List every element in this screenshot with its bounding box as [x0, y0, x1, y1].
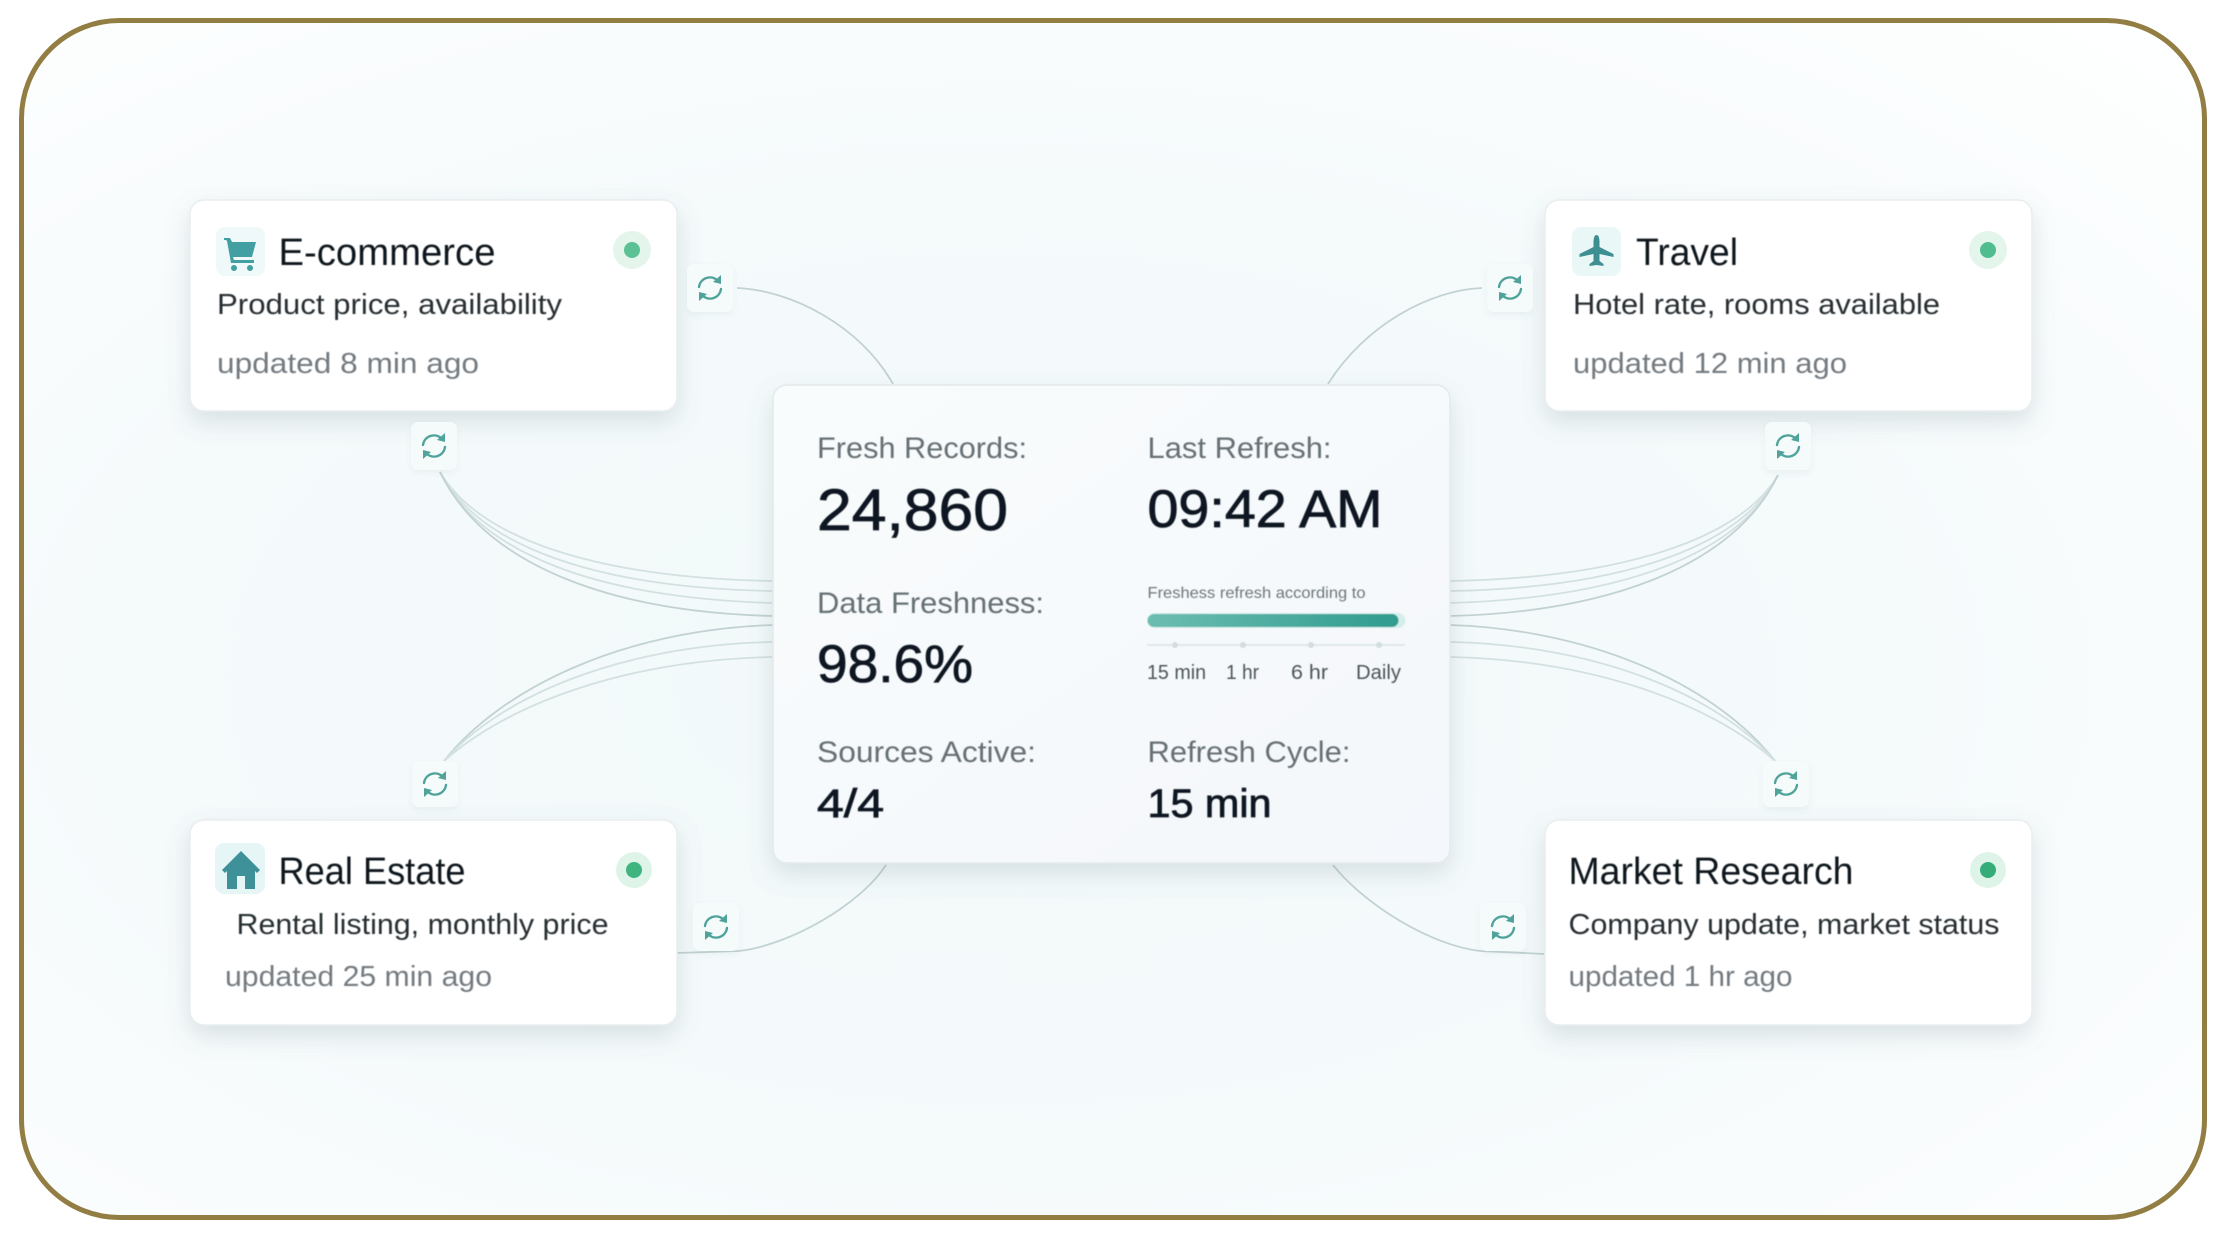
icon: sync, real estate right: [693, 903, 739, 951]
card: e-commerce: Product price, availability: [217, 289, 563, 321]
card: e-commerce: E-commerce: [278, 232, 496, 274]
icon: sync, e-commerce right: [687, 264, 733, 312]
stat: sources active: Sources Active:: [817, 736, 1036, 769]
stat: fresh records: [817, 432, 1027, 543]
refresh scale chart: Daily: [1356, 662, 1401, 684]
card: travel: updated 12 min ago: [1573, 348, 1847, 380]
stat: data freshness: 98.6%: [817, 635, 973, 694]
stat: data freshness: Data Freshness:: [817, 587, 1044, 620]
refresh scale chart: 1 hr: [1226, 662, 1259, 684]
refresh scale chart: [1147, 585, 1406, 684]
status dot: [1969, 231, 2007, 269]
card: travel: Travel: [1636, 232, 1738, 274]
card: e-commerce: updated 8 min ago: [217, 348, 479, 380]
refresh scale chart: Freshess refresh according to: [1148, 585, 1366, 602]
refresh scale chart: 6 hr: [1291, 662, 1328, 684]
icon: sync, market research left: [1480, 903, 1526, 951]
stat: last refresh: 09:42 AM: [1148, 480, 1382, 539]
stat: sources active: [817, 736, 1036, 826]
stat: fresh records: Fresh Records:: [817, 432, 1027, 465]
card: travel: [1545, 200, 2032, 411]
icon: sync, travel left: [1487, 264, 1533, 312]
card: e-commerce: [190, 200, 677, 411]
stat: refresh cycle: Refresh Cycle:: [1148, 736, 1350, 769]
status dot: [1970, 852, 2006, 888]
card: market research: updated 1 hr ago: [1568, 961, 1792, 993]
icon: sync, e-commerce bottom: [411, 422, 457, 470]
status dot: [616, 852, 652, 888]
stat: data freshness: [817, 587, 1044, 694]
card: travel: Hotel rate, rooms available: [1573, 289, 1940, 321]
stat: last refresh: [1148, 432, 1382, 539]
card: real estate: Real Estate: [278, 851, 466, 893]
card: real estate: [190, 820, 677, 1025]
icon: sync, real estate top: [412, 761, 458, 807]
card: real estate: updated 25 min ago: [225, 961, 492, 993]
stat: refresh cycle: [1148, 736, 1350, 826]
card: market research: Market Research: [1568, 851, 1854, 893]
card: market research: [1545, 820, 2032, 1025]
stat: refresh cycle: 15 min: [1148, 782, 1272, 826]
stat: last refresh: Last Refresh:: [1148, 432, 1332, 465]
stat: fresh records: 24,860: [817, 478, 1008, 543]
icon: shopping cart: [216, 227, 265, 276]
central stats panel: [773, 385, 1450, 863]
stat: sources active: 4/4: [817, 782, 884, 826]
icon: house: [215, 843, 265, 894]
connector lines: [440, 288, 1778, 954]
card: real estate: Rental listing, monthly price: [236, 909, 608, 941]
icon: airplane: [1572, 227, 1621, 276]
refresh scale chart: 15 min: [1147, 662, 1206, 684]
status dot: [613, 231, 651, 269]
icon: sync, travel bottom: [1765, 422, 1811, 470]
card: market research: Company update, market status: [1568, 909, 2000, 941]
icon: sync, market research top: [1763, 761, 1809, 807]
